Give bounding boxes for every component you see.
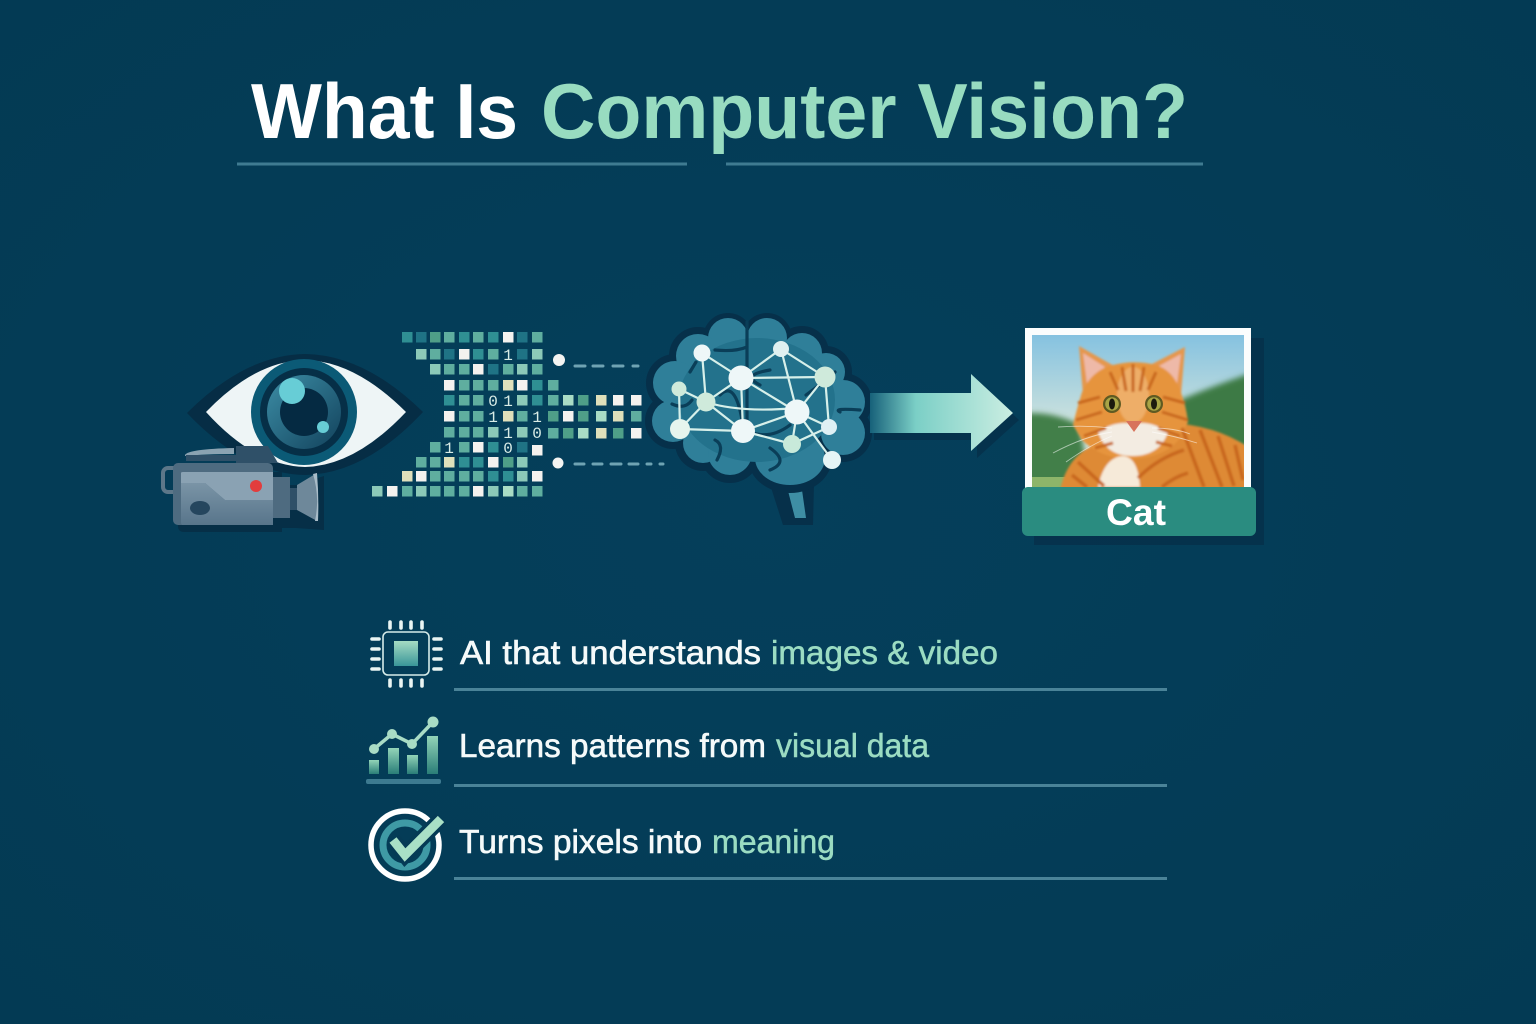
bullet text [459, 727, 930, 764]
pixel data grid: 1 [488, 409, 498, 427]
bullet text: visual data [776, 727, 930, 764]
brain stem [768, 478, 814, 525]
bullet text [459, 823, 835, 860]
bullet text: Learns patterns from [459, 727, 766, 764]
pixel data grid [372, 332, 642, 496]
icon: chip [372, 622, 441, 686]
bullet text: meaning [712, 823, 835, 860]
cat eyes [1103, 395, 1163, 413]
bullet text: Turns pixels into [459, 823, 702, 860]
bullet text: AI that understands [460, 634, 761, 671]
pixel data grid: 0 [532, 425, 542, 443]
icon: video camera [163, 446, 324, 532]
brain lobes [652, 318, 865, 485]
pixel data grid: 1 [503, 425, 513, 443]
pixel data grid: 0 [503, 440, 513, 458]
icon: eye with lens [187, 354, 423, 475]
pixel data grid: 1 [503, 393, 513, 411]
icon: growth chart [366, 716, 441, 784]
bullet 1 [372, 622, 1167, 691]
pixel data grid: 1 [444, 440, 454, 458]
bullet 2 [366, 716, 1167, 787]
pixel data grid: 0 [488, 393, 498, 411]
network nodes [670, 341, 841, 469]
whiskers [1053, 426, 1197, 462]
label [1022, 487, 1256, 536]
dotted connectors [552, 354, 663, 468]
pixel data grid: 1 [503, 347, 513, 365]
network edges [679, 349, 832, 460]
photo card: cat [1020, 328, 1264, 545]
title [237, 67, 1203, 166]
bullet text: images & video [771, 634, 998, 671]
title: What Is [251, 67, 518, 155]
cat nose [1126, 421, 1142, 432]
bullet text [460, 634, 998, 671]
arrow [870, 374, 1019, 458]
icon: brain with neural network [645, 313, 872, 525]
card shadow [1034, 338, 1264, 545]
pixel data grid: 1 [532, 409, 542, 427]
icon: target check [371, 811, 441, 879]
brain creases [672, 322, 860, 470]
brain outline [645, 313, 872, 493]
photo frame [1025, 328, 1251, 494]
cat photo [1032, 335, 1244, 487]
label: Cat [1106, 492, 1166, 533]
bullet 3 [371, 811, 1167, 880]
title: Computer Vision? [541, 67, 1188, 155]
